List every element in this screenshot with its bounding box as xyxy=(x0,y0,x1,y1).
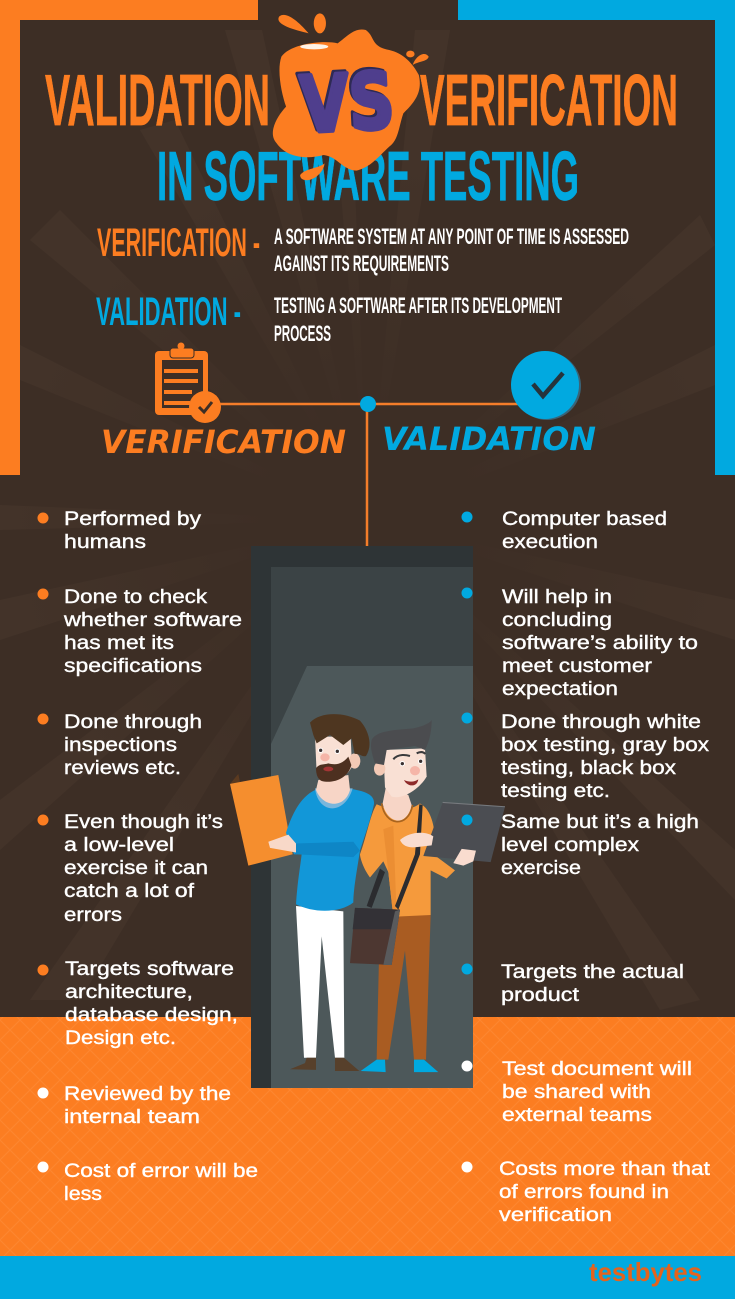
illustration: two testers xyxy=(230,714,505,1072)
item: will help: meet customer xyxy=(502,655,653,677)
item: white box xyxy=(462,711,709,802)
item: costs more: Costs more than that xyxy=(499,1158,711,1180)
item: test document xyxy=(462,1058,692,1126)
definition: validation: VALIDATION - xyxy=(96,290,241,334)
item: done through inspections: inspections xyxy=(64,734,177,756)
item: targets architecture: Targets software xyxy=(65,958,234,980)
item: will help: software’s ability to xyxy=(502,632,698,654)
VS splash badge: VS xyxy=(296,55,395,149)
right bullets xyxy=(462,508,711,1226)
item: cost of error: less xyxy=(64,1183,102,1205)
item: will help: expectation xyxy=(502,678,618,700)
item: computer based: execution xyxy=(502,531,598,553)
icon: clipboard with check xyxy=(155,342,221,423)
blue footer band xyxy=(0,1256,735,1299)
item: done to check: Done to check xyxy=(64,586,207,608)
item: low-level exercise: a low-level xyxy=(64,834,174,856)
item: computer based xyxy=(462,508,667,553)
item: done to check: whether software xyxy=(63,609,242,631)
item: costs more xyxy=(462,1158,711,1226)
item: done to check xyxy=(38,586,242,677)
doorway xyxy=(251,546,473,1088)
item: low-level exercise: Even though it’s xyxy=(64,811,223,833)
VS splash badge: VS xyxy=(298,57,397,151)
item: low-level exercise: catch a lot of xyxy=(64,880,195,902)
item: targets architecture: database design, xyxy=(65,1004,238,1026)
item: targets product: product xyxy=(501,984,580,1006)
title line 1 left: VALIDATION: VALIDATION xyxy=(45,61,270,141)
item: same high level: Same but it’s a high xyxy=(501,811,699,833)
icon: blue check circle xyxy=(511,351,581,420)
item: same high level: exercise xyxy=(501,857,581,879)
definition: verification: AGAINST ITS REQUIREMENTS xyxy=(274,251,449,276)
item: done through inspections: reviews etc. xyxy=(64,757,181,779)
item: done to check: has met its xyxy=(64,632,174,654)
heading: VALIDATION: VALIDATION xyxy=(382,420,596,458)
item: performed by humans: Performed by xyxy=(64,508,201,530)
item: costs more: of errors found in xyxy=(499,1181,669,1203)
item: same high level: level complex xyxy=(501,834,639,856)
blue frame top right xyxy=(458,0,735,475)
item: targets product: Targets the actual xyxy=(501,961,684,983)
definition: verification: VERIFICATION - xyxy=(97,221,260,265)
item: will help: Will help in xyxy=(502,586,612,608)
item: test document: external teams xyxy=(502,1104,652,1126)
logo: testbytes: testbytes xyxy=(589,1257,702,1287)
item: white box: box testing, gray box xyxy=(501,734,709,756)
item: low-level exercise xyxy=(38,811,223,926)
VS splash badge xyxy=(273,13,429,180)
definition: validation: PROCESS xyxy=(274,321,331,346)
item: white box: Done through white xyxy=(501,711,701,733)
orange frame top left xyxy=(0,0,258,475)
item: test document: Test document will xyxy=(502,1058,692,1080)
item: white box: testing etc. xyxy=(501,780,610,802)
item: done through inspections xyxy=(38,711,202,779)
item: will help xyxy=(462,586,698,700)
left bullets xyxy=(38,508,258,1205)
item: low-level exercise: errors xyxy=(64,904,122,926)
head: man with grey hair xyxy=(371,720,432,822)
background rays xyxy=(0,30,735,1010)
item: done through inspections: Done through xyxy=(64,711,202,733)
item: targets architecture: Design etc. xyxy=(65,1027,176,1049)
item: white box: testing, black box xyxy=(501,757,676,779)
definition: validation xyxy=(96,290,562,346)
man with laptop body xyxy=(350,802,505,1072)
item: performed by humans xyxy=(38,508,201,553)
item: computer based: Computer based xyxy=(502,508,667,530)
item: targets architecture: architecture, xyxy=(65,981,193,1003)
definition: verification xyxy=(97,221,629,276)
item: low-level exercise: exercise it can xyxy=(64,857,208,879)
item: cost of error xyxy=(38,1160,258,1205)
item: same high level xyxy=(462,811,699,879)
item: performed by humans: humans xyxy=(64,531,146,553)
item: reviewed by internal team: internal team xyxy=(64,1106,200,1128)
orange lower band xyxy=(0,1017,735,1257)
item: will help: concluding xyxy=(502,609,612,631)
item: done to check: specifications xyxy=(64,655,202,677)
man with folder body xyxy=(230,774,374,1071)
connector lines xyxy=(205,404,545,546)
connector dot xyxy=(360,396,376,412)
item: cost of error: Cost of error will be xyxy=(64,1160,258,1182)
item: targets architecture xyxy=(38,958,238,1049)
item: reviewed by internal team xyxy=(38,1083,231,1128)
heading: VERIFICATION: VERIFICATION xyxy=(101,423,346,461)
item: targets product xyxy=(462,961,684,1006)
item: costs more: verification xyxy=(499,1204,612,1226)
item: reviewed by internal team: Reviewed by the xyxy=(64,1083,231,1105)
item: test document: be shared with xyxy=(502,1081,651,1103)
head: bearded man xyxy=(310,714,370,808)
